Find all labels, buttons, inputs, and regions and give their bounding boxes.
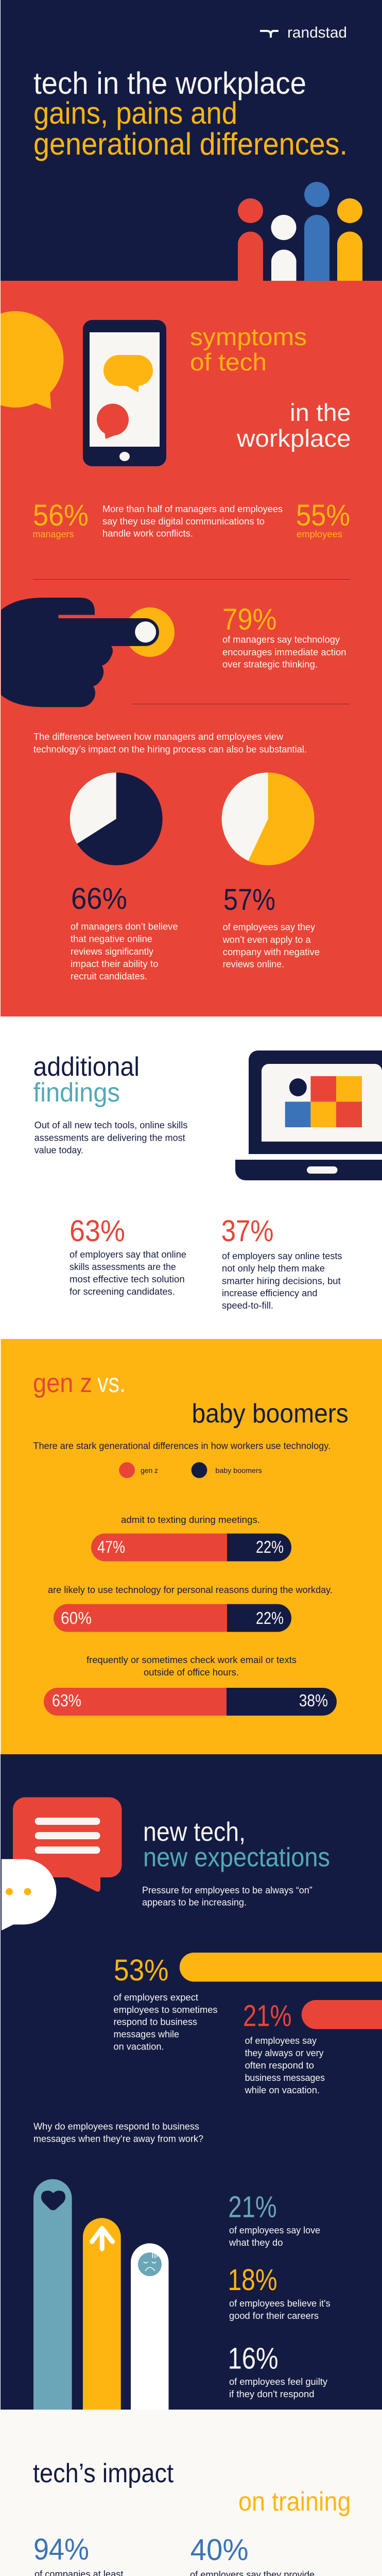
stat: 53% employers: 53% (114, 1954, 169, 1987)
heading: baby boomers: baby boomers (192, 1399, 349, 1429)
stat: 55% employees: employees (297, 529, 342, 539)
chart: personal reasons (48, 1585, 333, 1632)
stat: 37% employers: of employers say online tests (222, 1251, 342, 1261)
panel: new tech, new expectations (1, 1754, 382, 2410)
text: digital communications (102, 504, 283, 539)
stat: 56% managers: managers (33, 529, 74, 539)
stat: 21% love what they do: 21% (228, 2191, 277, 2224)
logo: randstad: randstad (287, 24, 347, 41)
text: why respond: messages when they're away from work? (33, 2134, 203, 2144)
stat: 57% employees: reviews online. (223, 959, 284, 970)
stat: 63% employers: of employers say that online (70, 1249, 186, 1260)
icon: tablet with chat (83, 320, 166, 466)
stat: 21% employees: business messages (245, 2073, 325, 2083)
title: gains, pains and (33, 96, 237, 130)
stat: 53% employers: of employers expect (113, 1992, 198, 2003)
stat: 55% employees: 55% (296, 499, 350, 532)
stat: 66% managers: impact their ability to (71, 959, 159, 969)
stat: 21% employees: of employees say (245, 2036, 317, 2046)
stat: 66% managers (71, 882, 178, 981)
stat: 16% feel guilty: of employees feel guilty (229, 2377, 327, 2387)
stat: 94% companies (33, 2533, 155, 2576)
heading: gen z vs.: gen z (33, 1368, 92, 1398)
stat: 63% employers: most effective tech solution (70, 1274, 185, 1284)
stat: 53% employers: messages while (113, 2029, 179, 2039)
stat: 79%: of managers say technology (222, 635, 340, 645)
stat: 18% good for careers: 18% (228, 2263, 277, 2297)
heading: gen z vs.: vs. (97, 1368, 126, 1398)
stat: 37% employers (221, 1214, 342, 1311)
stat: 21% employees: often respond to (245, 2060, 314, 2071)
chart: work email outside hours: outside of office hours. (144, 1667, 239, 1677)
stat: 18% good for careers: of employees believe it's (229, 2298, 331, 2309)
stat: 53% employers: on vacation. (113, 2041, 164, 2052)
text: online skills assessments: value today. (34, 1145, 83, 1155)
stat: 79%: over strategic thinking. (222, 659, 318, 670)
text: digital communications: handle work conflicts. (102, 529, 193, 539)
chart: teal bar with heart (33, 2179, 72, 2410)
stat: 21% employees: they always or very (245, 2048, 323, 2058)
chart: texting during meetings: 47% (97, 1537, 125, 1556)
chart: work email outside hours: 38% (299, 1691, 328, 1710)
stat: 16% feel guilty (228, 2342, 327, 2399)
panel: tech's impact on training (0, 2410, 382, 2576)
text: always on (142, 1885, 312, 1907)
chart: work email outside hours (44, 1655, 337, 1716)
title: tech in the workplace (33, 66, 306, 100)
heading: additional findings (33, 1052, 140, 1108)
chart: yellow bar with arrow (83, 2218, 121, 2410)
heading: on training: on training (238, 2487, 351, 2517)
chart: pie 66% (70, 773, 163, 866)
legend: gen z (141, 1467, 158, 1475)
stat: 18% good for careers: good for their careers (229, 2311, 319, 2321)
text: hiring process intro: The difference between how managers and employees view (33, 732, 284, 742)
heading: in the workplace: workplace (236, 425, 351, 452)
heading: in the workplace: in the (290, 399, 351, 426)
stat: 63% employers: 63% (70, 1214, 125, 1248)
stat: 16% feel guilty: 16% (228, 2342, 278, 2375)
stat: 37% employers: 37% (221, 1214, 274, 1248)
stat: 37% employers: smarter hiring decisions, but (222, 1276, 341, 1286)
stat: 21% love what they do: of employees say love (229, 2225, 320, 2235)
panel: symptoms of tech (1, 281, 382, 1016)
title (33, 66, 348, 161)
text: why respond (33, 2122, 203, 2144)
stat: 79% (222, 603, 346, 670)
stat: 37% employers: not only help them make (222, 1263, 325, 1274)
stat: 21% employees: while on vacation. (245, 2085, 320, 2095)
stat: 56% managers: 56% (33, 499, 89, 532)
icon: four people (238, 182, 362, 281)
text: why respond: Why do employees respond to business (33, 2122, 199, 2132)
stat: 79%: encourages immediate action (222, 647, 346, 657)
stat: 21% love what they do (228, 2191, 320, 2248)
stat: 79%: 79% (222, 603, 277, 636)
stat: 53% employers: employees to sometimes (113, 2005, 217, 2015)
chart: work email outside hours: frequently or sometimes check work email or texts (86, 1655, 297, 1665)
stat: 53% employers (113, 1953, 382, 2052)
logo: randstad (260, 24, 347, 41)
stat: 57% employees: of employees say they (223, 922, 315, 933)
text: generational differences: There are stark generational differences in how workers use technology. (33, 1440, 331, 1451)
stat: 66% managers: of managers don’t believe (71, 921, 178, 931)
chart: work email outside hours: 63% (52, 1691, 81, 1710)
stat: 37% employers: speed-to-fill. (222, 1300, 273, 1311)
stat: 57% employees: 57% (223, 883, 275, 917)
stat: 40% employers (190, 2533, 329, 2576)
panel: gen z vs baby boomers (1, 1339, 382, 1754)
text: hiring process intro (33, 732, 307, 754)
stat: 66% managers: 66% (71, 882, 127, 916)
icon: laptop (235, 1050, 382, 1180)
text: online skills assessments (34, 1120, 187, 1155)
panel: header (1, 0, 382, 281)
heading: additional findings: additional (33, 1052, 140, 1082)
stat: 66% managers: reviews significantly (71, 946, 153, 957)
stat: 57% employees (222, 883, 320, 970)
heading: tech's impact: tech’s impact (33, 2459, 173, 2488)
text: always on: appears to be increasing. (142, 1897, 247, 1907)
stat: 16% feel guilty: if they don't respond (229, 2389, 314, 2399)
stat: 21% employees: 21% (243, 1999, 291, 2033)
chart: texting during meetings (91, 1515, 291, 1561)
stat: 94% companies: 94% (33, 2533, 89, 2566)
stat: 21% love what they do: what they do (229, 2238, 283, 2248)
icon: pointing hand (1, 598, 175, 707)
text: digital communications: say they use digital communications to (102, 516, 265, 527)
stat: 63% employers (70, 1214, 186, 1297)
stat: 66% managers: recruit candidates. (71, 971, 147, 981)
chart: pie 57% (222, 773, 315, 866)
stat: 40% employers: 40% (190, 2533, 249, 2567)
chart: texting during meetings: 22% (256, 1537, 284, 1556)
title: generational differences. (33, 127, 348, 161)
stat: 57% employees: company with negative (223, 947, 320, 957)
heading: new tech, new expectations: new expectations (143, 1842, 330, 1872)
chart: texting during meetings: admit to texting during meetings. (121, 1515, 260, 1525)
text: always on: Pressure for employees to be always “on” (142, 1885, 312, 1895)
stat: 57% employees: won’t even apply to a (222, 935, 311, 945)
stat: 66% managers: that negative online (71, 934, 152, 944)
heading: symptoms of tech: of tech (190, 348, 267, 376)
heading: in the workplace (236, 399, 351, 452)
text: online skills assessments: assessments are delivering the most (34, 1132, 185, 1143)
chart: personal reasons: 60% (61, 1608, 92, 1628)
icon: yellow speech bubble (1, 311, 63, 409)
chart: personal reasons: are likely to use technology for personal reasons during the workday. (48, 1585, 333, 1595)
legend: baby boomers (215, 1467, 262, 1475)
panel: additional findings (1, 1016, 382, 1339)
text: online skills assessments: Out of all new tech tools, online skills (34, 1120, 187, 1130)
stat: 53% employers: respond to business (113, 2016, 197, 2027)
legend (119, 1462, 262, 1478)
chart: white bar with sad face (131, 2243, 169, 2410)
stat: 63% employers: for screening candidates. (70, 1286, 175, 1297)
heading: symptoms of tech (190, 323, 307, 376)
heading: symptoms of tech: symptoms (190, 323, 307, 350)
text: digital communications: More than half of managers and employees (102, 504, 283, 514)
chart: personal reasons: 22% (256, 1608, 284, 1628)
stat: 18% good for careers (228, 2263, 331, 2321)
heading: new tech, new expectations (143, 1817, 330, 1872)
heading: new tech, new expectations: new tech, (143, 1817, 246, 1847)
stat: 21% employees (243, 1999, 382, 2095)
stat: 37% employers: increase efficiency and (222, 1288, 318, 1298)
heading: additional findings: findings (33, 1078, 120, 1108)
icon: chat bubbles (2, 1797, 121, 1930)
stat: 63% employers: skills assessments are the (70, 1262, 176, 1272)
text: hiring process intro: technology’s impact on the hiring process can also be substantial. (33, 744, 307, 754)
